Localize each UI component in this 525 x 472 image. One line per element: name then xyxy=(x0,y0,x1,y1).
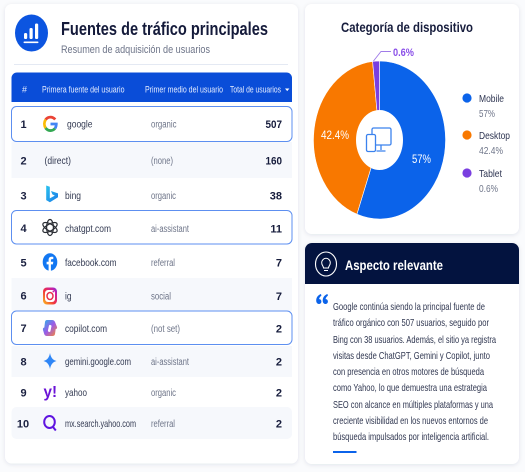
table row 7: copilot xyxy=(12,311,292,344)
table row 6: instagram: ig xyxy=(65,290,72,302)
insight header xyxy=(305,243,519,284)
table header: Primera fuente del usuario xyxy=(42,84,124,96)
table row 5: facebook xyxy=(20,253,282,271)
panel: traffic sources xyxy=(5,4,298,464)
legend: Tablet xyxy=(479,168,502,180)
table header: Primer medio del usuario xyxy=(145,84,223,96)
table row 10: mx.search.yahoo: 2 xyxy=(276,418,282,430)
table row 3: bing xyxy=(20,186,282,202)
table row 1: google: 507 xyxy=(266,119,282,131)
legend: Mobile xyxy=(479,93,504,105)
table row 9: yahoo xyxy=(20,384,282,401)
icon: magnifier xyxy=(44,416,56,430)
table header xyxy=(12,72,292,102)
pie chart xyxy=(313,47,446,219)
table row 10: mx.search.yahoo: 10 xyxy=(17,418,29,430)
table row 8: gemini xyxy=(12,346,292,377)
table row 10: mx.search.yahoo: referral xyxy=(151,419,175,430)
legend xyxy=(462,93,510,195)
table row 10: mx.search.yahoo: mx.search.yahoo.com xyxy=(65,418,136,430)
table row 7: copilot: 2 xyxy=(276,324,282,336)
pie label: tablet: 0.6% xyxy=(393,47,414,59)
insight heading: Aspecto relevante xyxy=(345,257,443,273)
table row 9: yahoo: 2 xyxy=(276,388,282,400)
table row 6: instagram: 7 xyxy=(276,291,282,303)
icon: facebook xyxy=(43,253,57,271)
table row 4: chatgpt: 4 xyxy=(20,223,27,235)
pie label: desktop: 42.4% xyxy=(321,130,349,142)
icon: devices xyxy=(366,128,391,152)
table row 2: direct: (none) xyxy=(151,156,173,167)
table row 1: google xyxy=(12,106,292,142)
table row 3: bing: organic xyxy=(151,191,176,202)
table row 9: yahoo: yahoo xyxy=(65,387,87,399)
table row 3: bing: 38 xyxy=(270,190,282,202)
legend: 0.6% xyxy=(479,183,498,195)
icon: light bulb xyxy=(316,252,336,276)
table row 5: facebook: 7 xyxy=(276,258,282,270)
icon: chatgpt xyxy=(41,220,59,236)
table row 2: direct: (direct) xyxy=(44,155,71,167)
table row 2: direct: 160 xyxy=(266,156,282,168)
table row 3: bing: bing xyxy=(65,190,81,202)
table row 6: instagram: 6 xyxy=(20,290,27,302)
table row 5: facebook: facebook.com xyxy=(65,257,117,269)
heading: Categoría de dispositivo xyxy=(341,19,473,35)
table row 8: gemini: 2 xyxy=(276,356,282,368)
title: Fuentes de tráfico principales xyxy=(61,19,268,39)
panel: insight xyxy=(305,243,519,464)
insight paragraph xyxy=(333,301,496,443)
icon: bing xyxy=(46,186,58,202)
table row 10: mx.search.yahoo xyxy=(12,407,292,439)
table row 7: copilot: (not set) xyxy=(151,324,180,335)
icon: bar chart badge xyxy=(15,14,48,52)
icon: yahoo: y! xyxy=(44,384,57,401)
table row 4: chatgpt: chatgpt.com xyxy=(65,223,111,235)
table row 8: gemini: ai-assistant xyxy=(151,357,189,368)
icon: quote mark xyxy=(316,294,328,304)
table row 1: google: organic xyxy=(151,120,176,130)
panel: device category xyxy=(305,4,519,234)
table row 5: facebook: referral xyxy=(151,258,175,269)
table row 7: copilot: copilot.com xyxy=(65,323,107,335)
icon: copilot xyxy=(43,320,57,336)
table row 8: gemini: 8 xyxy=(20,356,27,368)
table row 9: yahoo: organic xyxy=(151,388,176,399)
table row 8: gemini: gemini.google.com xyxy=(65,356,131,368)
table row 4: chatgpt: 11 xyxy=(270,224,282,236)
table row 4: chatgpt: ai-assistant xyxy=(151,224,189,235)
table row 2: direct xyxy=(12,142,292,178)
legend: 42.4% xyxy=(479,145,503,157)
table header: # xyxy=(22,84,28,96)
pie label: mobile: 57% xyxy=(412,154,431,166)
icon: instagram xyxy=(43,288,57,304)
legend: 57% xyxy=(479,108,495,120)
icon: google xyxy=(44,117,56,131)
table header: Total de usuarios xyxy=(230,84,281,96)
table row 9: yahoo: 9 xyxy=(20,388,27,400)
table row 4: chatgpt xyxy=(12,210,292,244)
table row 5: facebook: 5 xyxy=(20,258,27,270)
table row 7: copilot: 7 xyxy=(20,323,27,335)
legend: Desktop xyxy=(479,130,510,142)
subtitle: Resumen de adquisición de usuarios xyxy=(61,44,210,56)
table row 6: instagram xyxy=(12,278,292,311)
table row 6: instagram: social xyxy=(151,292,171,302)
pie label: tablet xyxy=(374,47,414,61)
table row 1: google: google xyxy=(67,118,93,130)
table row 3: bing: 3 xyxy=(20,190,27,202)
table row 2: direct: 2 xyxy=(20,156,27,168)
icon: gemini xyxy=(44,353,56,369)
table row 1: google: 1 xyxy=(20,119,27,131)
